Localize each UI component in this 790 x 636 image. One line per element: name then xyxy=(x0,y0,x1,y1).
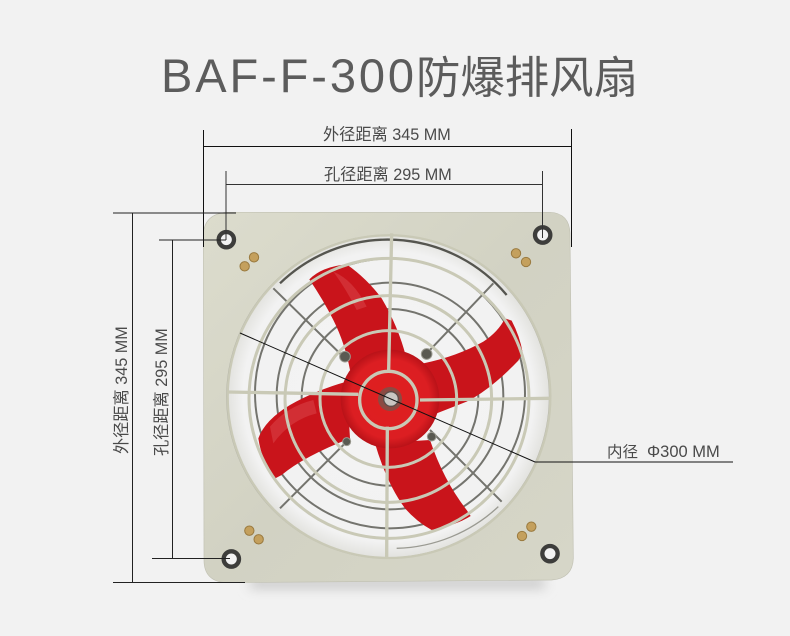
motor mount bolts xyxy=(340,349,436,446)
fan blades xyxy=(258,264,523,530)
dimension: hole height 295 MM: 孔径距离 295 MM xyxy=(153,328,171,456)
dimension: hole height 295 MM xyxy=(152,240,230,558)
blade: bottom xyxy=(375,440,471,530)
dimension: inner diameter 300 MM xyxy=(240,333,733,462)
rear guard rings xyxy=(255,240,525,548)
fan product photo xyxy=(203,212,573,583)
brass screws xyxy=(240,249,536,544)
mounting holes xyxy=(219,227,558,567)
dimension: outer width 345 MM xyxy=(203,126,572,247)
fan opening xyxy=(227,235,550,558)
blade highlights xyxy=(270,272,367,443)
dimension: outer height 345 MM: 外径距离 345 MM xyxy=(113,326,131,454)
blade: top xyxy=(309,264,406,370)
dimension: hole width 295 MM: 孔径距离 295 MM xyxy=(324,166,452,184)
front wire guard xyxy=(227,233,550,558)
blade: left xyxy=(258,382,350,479)
drop shadow under fan xyxy=(250,578,545,588)
dimension: outer height 345 MM xyxy=(113,213,245,582)
dimension: hole width 295 MM xyxy=(226,166,542,240)
dimension: outer width 345 MM: 外径距离 345 MM xyxy=(323,126,451,144)
panel: housing plate xyxy=(203,212,573,583)
dimension: inner diameter 300 MM: Φ300 MM xyxy=(647,443,720,461)
hub xyxy=(341,350,439,448)
blade: right xyxy=(423,318,523,413)
dimension: inner diameter 300 MM: 内径 xyxy=(607,444,638,461)
title: 防爆排风扇 xyxy=(416,54,638,103)
center hub cap xyxy=(378,387,402,411)
title: BAF-F-300 xyxy=(161,49,417,102)
